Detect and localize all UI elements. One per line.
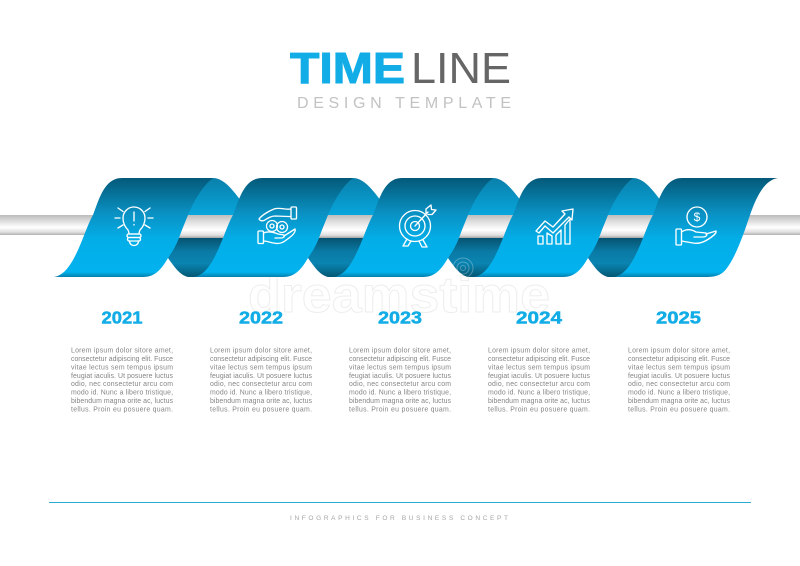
footer text: INFOGRAPHICS FOR BUSINESS CONCEPT (290, 515, 508, 522)
icon: hands and gears (258, 207, 296, 244)
title: LINE (411, 44, 511, 93)
text block 2021: feugiat iaculis. Ut posuere luctus (71, 373, 174, 380)
text block 2025 (628, 348, 731, 414)
text block 2023: odio, nec consectetur arcu com (349, 381, 451, 388)
icon: target (400, 205, 436, 247)
text block 2024 (488, 348, 591, 414)
text block 2021 (71, 348, 174, 414)
title (290, 44, 511, 93)
year 2023: 2023 (378, 308, 422, 328)
back fold 2 (308, 178, 381, 277)
text block 2023 (349, 348, 452, 414)
text block 2021: bibendum magna orite ac, luctus (71, 398, 174, 405)
text block 2021: modo id. Nunc a libero tristique, (71, 390, 173, 397)
text block 2023: consectetur adipiscing elit. Fusce (349, 356, 451, 363)
spiral ribbon (54, 178, 778, 278)
icon: hand with coin: $ (694, 210, 701, 224)
text block 2021: Lorem ipsum dolor sitore amet, (71, 348, 173, 354)
text block 2022: modo id. Nunc a libero tristique, (210, 390, 312, 397)
text block 2025: consectetur adipiscing elit. Fusce (628, 356, 730, 363)
year 2024: 2024 (516, 308, 562, 328)
title: TIME (290, 44, 405, 93)
text block 2024: Lorem ipsum dolor sitore amet, (488, 348, 590, 354)
ribbon band 4 (474, 178, 633, 277)
text block 2024: consectetur adipiscing elit. Fusce (488, 356, 590, 363)
text block 2024: bibendum magna orite ac, luctus (488, 398, 591, 405)
text block 2024: feugiat iaculis. Ut posuere luctus (488, 373, 591, 380)
text block 2021: odio, nec consectetur arcu com (71, 381, 173, 388)
text block 2025: odio, nec consectetur arcu com (628, 381, 730, 388)
watermark emblem (453, 258, 473, 278)
text block 2024: tellus. Proin eu posuere quam. (488, 406, 590, 414)
back fold 4 (588, 178, 661, 277)
text block 2023: tellus. Proin eu posuere quam. (349, 406, 451, 414)
text block 2022 (210, 348, 313, 414)
watermark: dreamstime (248, 267, 550, 323)
text block 2022: tellus. Proin eu posuere quam. (210, 406, 312, 414)
text block 2025: tellus. Proin eu posuere quam. (628, 406, 730, 414)
text block 2024: vitae lectus sem tempus ipsum (488, 364, 590, 371)
text block 2023: bibendum magna orite ac, luctus (349, 398, 452, 405)
text block 2025: vitae lectus sem tempus ipsum (628, 364, 730, 371)
back fold 1 (168, 178, 241, 277)
subtitle: DESIGN TEMPLATE (297, 95, 511, 112)
ribbon band 2 (194, 178, 353, 277)
text block 2022: feugiat iaculis. Ut posuere luctus (210, 373, 313, 380)
text block 2021: vitae lectus sem tempus ipsum (71, 364, 173, 371)
text block 2023: modo id. Nunc a libero tristique, (349, 390, 451, 397)
text block 2025: Lorem ipsum dolor sitore amet, (628, 348, 730, 354)
text block 2025: bibendum magna orite ac, luctus (628, 398, 731, 405)
year 2021: 2021 (102, 308, 143, 328)
icon: growth chart (536, 209, 573, 244)
text block 2024: odio, nec consectetur arcu com (488, 381, 590, 388)
ribbon band 1 (54, 178, 213, 277)
text block 2022: Lorem ipsum dolor sitore amet, (210, 348, 312, 354)
icon: hand with coin (676, 207, 716, 245)
text block 2022: vitae lectus sem tempus ipsum (210, 364, 312, 371)
back fold 3 (448, 178, 521, 277)
ribbon band 5 (614, 178, 778, 277)
text block 2025: feugiat iaculis. Ut posuere luctus (628, 373, 731, 380)
pole (0, 215, 800, 235)
text block 2022: bibendum magna orite ac, luctus (210, 398, 313, 405)
text block 2025: modo id. Nunc a libero tristique, (628, 390, 730, 397)
text block 2023: vitae lectus sem tempus ipsum (349, 364, 451, 371)
text block 2023: Lorem ipsum dolor sitore amet, (349, 348, 451, 354)
text block 2023: feugiat iaculis. Ut posuere luctus (349, 373, 452, 380)
text block 2021: consectetur adipiscing elit. Fusce (71, 356, 173, 363)
ribbon band 3 (334, 178, 493, 277)
year 2022: 2022 (239, 308, 283, 328)
text block 2021: tellus. Proin eu posuere quam. (71, 406, 173, 414)
text block 2022: consectetur adipiscing elit. Fusce (210, 356, 312, 363)
icon: light bulb (115, 207, 153, 246)
text block 2022: odio, nec consectetur arcu com (210, 381, 312, 388)
text block 2024: modo id. Nunc a libero tristique, (488, 390, 590, 397)
year 2025: 2025 (656, 308, 701, 328)
